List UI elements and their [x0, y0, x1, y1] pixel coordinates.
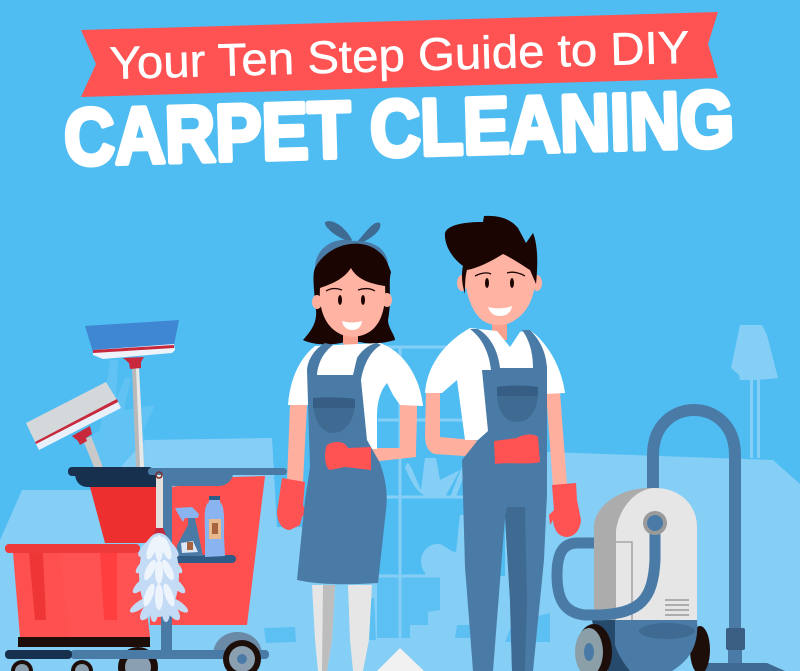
woman shirt: [288, 343, 423, 449]
man right glove: [549, 483, 581, 537]
vacuum hose: [557, 525, 655, 615]
man hair: [445, 216, 537, 294]
vacuum cleaner: [557, 410, 785, 671]
man overalls: [462, 329, 547, 671]
feather duster: [128, 472, 190, 623]
woman cleaner: [277, 221, 423, 671]
cleaner bottle: [205, 497, 225, 557]
woman face: [312, 268, 392, 337]
vacuum wheels: [690, 626, 710, 671]
vacuum body: [594, 488, 697, 620]
rug patches: [264, 613, 550, 643]
broom: [85, 320, 179, 467]
man shirt: [425, 328, 565, 440]
vacuum nozzle: [697, 628, 785, 671]
cleaning cart: [5, 320, 287, 671]
plant behind mops: [83, 360, 155, 467]
window: [345, 347, 600, 641]
mop: [26, 382, 121, 467]
woman right arm: [371, 405, 417, 462]
vacuum base: [592, 620, 697, 671]
man right arm: [546, 392, 567, 487]
cart tray: [68, 467, 287, 655]
woman middle glove: [325, 442, 371, 470]
red bucket back: [90, 487, 157, 543]
wheels and base bar: [5, 632, 269, 671]
woman legs: [312, 585, 335, 671]
banner: [81, 12, 718, 97]
front red bin: [5, 544, 150, 647]
man face: [457, 240, 542, 325]
lamp: [731, 325, 778, 458]
shelf with bottles: [175, 496, 236, 563]
man left arm: [425, 392, 494, 458]
man neck: [492, 320, 507, 340]
banner text: Your Ten Step Guide to DIY: [109, 21, 690, 89]
white triangle at bottom: [377, 648, 424, 671]
red bucket right: [150, 476, 265, 625]
man cleaner: [425, 216, 581, 671]
woman left arm and glove: [277, 405, 307, 530]
woman neck: [343, 330, 358, 350]
spray bottle: [176, 514, 203, 556]
background room scene: [0, 325, 800, 671]
vacuum tube: [653, 410, 735, 632]
man middle glove: [494, 434, 540, 464]
woman hair and bow: [303, 221, 395, 344]
woman apron: [297, 343, 387, 584]
